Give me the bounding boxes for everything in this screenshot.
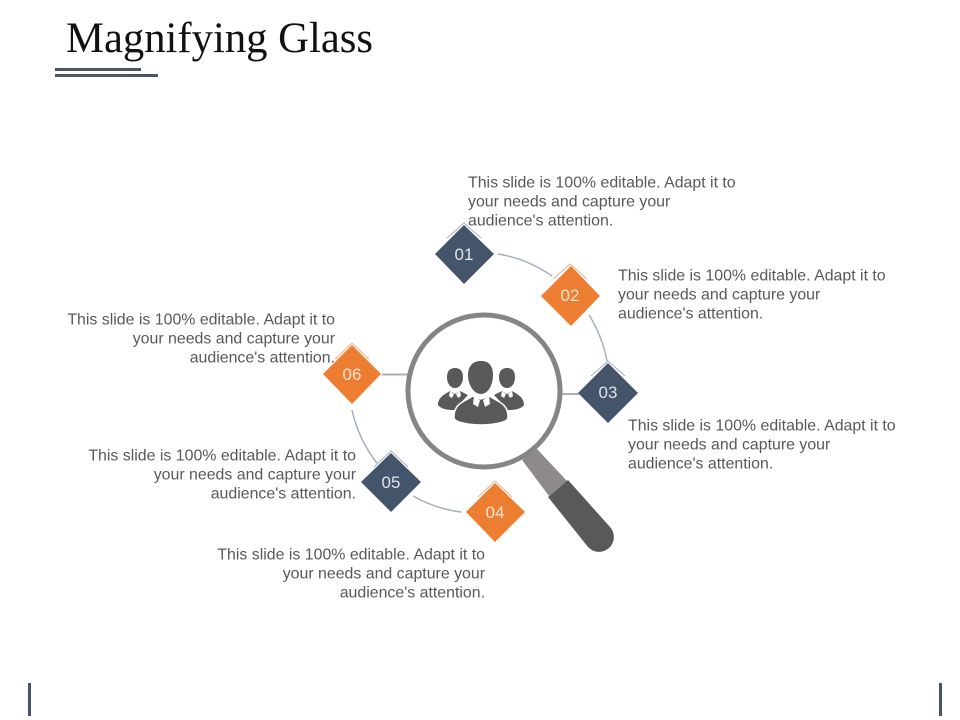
text block 04: your needs and capture your	[283, 566, 486, 582]
text block 02: your needs and capture your	[618, 286, 821, 304]
text block 02	[618, 268, 886, 322]
text block 03: audience's attention.	[628, 456, 773, 472]
step 06	[323, 343, 381, 404]
step 01	[435, 223, 494, 284]
right person	[494, 368, 524, 410]
centre person	[454, 361, 508, 425]
text block 06: This slide is 100% editable. Adapt it to	[67, 312, 335, 328]
text block 04: This slide is 100% editable. Adapt it to	[217, 546, 485, 564]
text block 05	[88, 448, 357, 502]
step 02: 02	[561, 286, 579, 305]
text block 03	[628, 418, 896, 472]
text block 06	[67, 312, 336, 366]
text block 03: This slide is 100% editable. Adapt it to	[628, 418, 896, 434]
text block 01	[468, 174, 736, 230]
text block 05: This slide is 100% editable. Adapt it to	[88, 448, 356, 464]
text block 06: audience's attention.	[190, 350, 335, 366]
text block 02: This slide is 100% editable. Adapt it to	[618, 268, 886, 284]
step 04: 04	[486, 503, 504, 522]
step 04	[466, 481, 525, 542]
lens	[408, 315, 560, 467]
text block 01: audience's attention.	[468, 212, 613, 230]
text block 05: your needs and capture your	[154, 466, 357, 484]
text block 04	[217, 546, 486, 602]
footer mark: right	[939, 683, 942, 716]
step 06: 06	[343, 365, 361, 384]
text block 05: audience's attention.	[211, 486, 356, 502]
left person	[438, 368, 468, 410]
step 03	[578, 361, 638, 423]
title: Magnifying Glass	[66, 15, 373, 62]
text block 01: your needs and capture your	[468, 194, 671, 210]
text block 02: audience's attention.	[618, 306, 763, 322]
step 03: 03	[599, 383, 617, 402]
text block 01: This slide is 100% editable. Adapt it to	[468, 174, 736, 192]
step 02	[541, 264, 600, 326]
connecting arcs	[352, 254, 607, 512]
magnifying glass	[408, 315, 614, 552]
text block 03: your needs and capture your	[628, 436, 831, 454]
step 05	[361, 451, 421, 512]
footer mark: left	[28, 683, 31, 716]
text block 06: your needs and capture your	[133, 330, 336, 348]
handle neck	[522, 449, 567, 496]
step 05: 05	[382, 473, 400, 492]
text block 04: audience's attention.	[340, 584, 485, 602]
title underline	[55, 68, 158, 77]
step 01: 01	[455, 245, 473, 264]
icon: three business people	[438, 361, 524, 425]
handle grip	[548, 480, 614, 552]
